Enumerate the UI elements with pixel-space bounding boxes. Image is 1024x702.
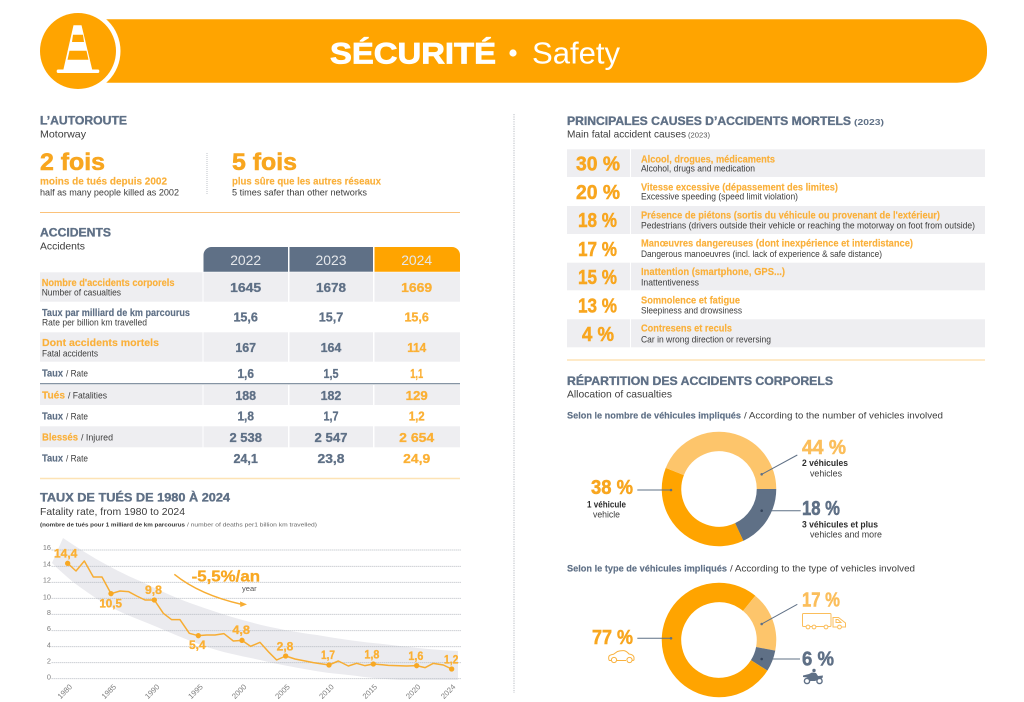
row: injured rate: 24,9: [403, 451, 430, 466]
heading: motorway: [40, 116, 127, 141]
data labels: 14,4: [54, 547, 77, 561]
cause: wrong direction: 4 %: [582, 324, 614, 346]
cause: manoeuvres: [578, 239, 913, 261]
row: rate per billion km: 15,6: [233, 310, 258, 325]
label: 18 percent: vehicles and more: [810, 529, 882, 539]
y axis labels: 16: [43, 543, 51, 552]
row: casualties: 1678: [316, 280, 346, 295]
x axis labels: 2020: [404, 682, 422, 701]
y axis labels: 14: [43, 560, 51, 569]
cause: sleepiness: Sleepiness and drowsiness: [641, 305, 742, 315]
stat: 5 fois: 5 times safer than other networks: [232, 188, 368, 198]
label: 17 percent trucks: [760, 590, 846, 629]
row: fatal accidents: Fatal accidents: [42, 349, 98, 359]
label: 6 percent motorcycles: 6 %: [802, 648, 834, 670]
cause: inattention: Inattentiveness: [641, 277, 699, 287]
label: 77 percent cars: [592, 627, 672, 663]
row: rate per billion km: 15,6: [404, 310, 429, 325]
panel: motorway: [40, 116, 460, 212]
label: 18 percent: 3 véhicules et plus: [802, 519, 878, 529]
cause: speeding: [576, 182, 838, 204]
label: 17 percent trucks: 17 %: [802, 590, 840, 612]
data labels: 1,2: [444, 652, 458, 666]
row: fatalities rate: Taux: [42, 411, 63, 422]
row: injured: 2 547: [314, 430, 348, 445]
row: injured rate: 24,1: [233, 451, 258, 466]
heading: accidents: ACCIDENTS: [40, 228, 111, 240]
y axis labels: 10: [43, 592, 51, 601]
icon: motorcycle: [803, 669, 823, 684]
trend band: [52, 538, 458, 680]
donut chart: type of vehicles: [652, 573, 786, 702]
row: injured: 2 538: [229, 430, 262, 445]
heading: accidents: [40, 228, 111, 253]
cause: wrong direction: Contresens et reculs: [641, 324, 732, 335]
row: casualties: 1669: [401, 280, 432, 295]
title: Safety: [532, 36, 620, 70]
y axis labels: 6: [47, 624, 51, 633]
x axis labels: 2010: [317, 682, 336, 701]
cause row backgrounds: [567, 149, 985, 347]
cause: speeding: Vitesse excessive (dépassement des limites): [641, 182, 838, 193]
label: 6 percent motorcycles: [760, 648, 834, 684]
row: fatal accidents rate: Taux: [42, 368, 63, 379]
row: casualties: 1645: [230, 280, 261, 295]
heading: motorway: L’AUTOROUTE: [40, 116, 127, 128]
x axis labels: [56, 682, 458, 701]
panel: fatal accident causes: [567, 116, 985, 360]
row: fatalities rate: 1,8: [237, 408, 254, 423]
data points: [65, 561, 454, 672]
row: fatalities: [42, 388, 428, 403]
trend arrow and label: -5,5%/an: [192, 569, 260, 586]
data labels: 1,7: [321, 648, 335, 662]
heading: motorway: Motorway: [40, 129, 87, 141]
row: casualties: Number of casualties: [42, 288, 121, 298]
cause: pedestrians: 18 %: [578, 210, 617, 232]
header banner: [20, 8, 987, 94]
heading: accidents: Accidents: [40, 241, 85, 253]
heading: fatality rate: Fatality rate, from 1980 to 2024: [40, 506, 185, 518]
row: injured rate: Taux: [42, 454, 63, 465]
row: fatal accidents: 164: [321, 340, 342, 355]
subheading: type of vehicles: / According to the type of vehicles involved: [730, 564, 915, 575]
panel: allocation of casualties: [567, 375, 943, 702]
row: fatalities: / Fatalities: [68, 391, 107, 401]
cause: pedestrians: Pedestrians (drivers outside their vehicle or reaching the motorway on foot from outside): [641, 221, 975, 231]
heading: fatality rate: TAUX DE TUÉS DE 1980 À 2024: [40, 492, 231, 505]
y axis labels: 4: [47, 640, 51, 649]
line chart: [43, 543, 462, 701]
cause: wrong direction: [582, 324, 771, 346]
label: 38 percent: 38 %: [591, 477, 633, 499]
y axis labels: [43, 543, 51, 682]
data labels: 1,8: [364, 647, 379, 661]
row: rate per billion km: Rate per billion km travelled: [42, 318, 147, 328]
row: rate per billion km: Taux par milliard de km parcourus: [42, 308, 190, 319]
row: injured: Blessés: [42, 432, 78, 444]
data labels: 2,8: [277, 640, 293, 654]
table header years: 2023: [316, 252, 347, 268]
label: 44 percent: 2 véhicules: [802, 458, 848, 468]
subheading: number of vehicles: Selon le nombre de véhicules impliqués: [567, 410, 741, 421]
title: [330, 36, 620, 70]
row: fatal accidents rate: 1,1: [410, 366, 423, 381]
row: injured rate: 23,8: [318, 451, 344, 466]
cause: inattention: 15 %: [578, 267, 617, 289]
label: 44 percent: [760, 437, 848, 479]
row: fatalities: Tués: [42, 390, 65, 402]
y axis labels: 12: [43, 576, 51, 585]
label: 38 percent: [587, 477, 672, 520]
data labels: 1,6: [408, 649, 423, 663]
stat: 2 fois: 2 fois: [40, 149, 105, 176]
label: 38 percent: 1 véhicule: [587, 500, 626, 510]
row: fatal accidents rate: 1,6: [237, 366, 254, 381]
cause: alcohol: Alcool, drogues, médicaments: [641, 154, 775, 165]
row: injured: / Injured: [81, 433, 113, 443]
x axis labels: 2015: [361, 682, 379, 701]
y axis labels: 0: [47, 673, 51, 682]
row: fatalities rate: 1,7: [324, 408, 338, 423]
row: fatalities rate: 1,2: [409, 408, 425, 423]
heading: allocation: Allocation of casualties: [567, 389, 672, 401]
row: injured: 2 654: [399, 430, 435, 445]
label: 44 percent: vehicles: [810, 469, 842, 479]
y axis labels: 2: [47, 656, 51, 665]
heading: fatality rate: / number of deaths per1 billion km travelled): [187, 523, 317, 529]
row: fatalities rate: [42, 408, 425, 423]
label: 38 percent: vehicle: [593, 510, 620, 520]
x axis labels: 2005: [273, 682, 292, 701]
row: casualties: [42, 278, 432, 298]
data labels: 4,8: [232, 623, 250, 637]
cause: manoeuvres: Manœuvres dangereuses (dont inexpérience et interdistance): [641, 239, 913, 250]
subheading: number of vehicles: [567, 410, 943, 421]
cause: alcohol: [576, 154, 775, 176]
label: 18 percent: [760, 498, 882, 539]
trend arrow and label: year: [242, 586, 257, 593]
heading: fatality rate: [40, 492, 317, 529]
x axis labels: 2000: [230, 682, 248, 701]
subheading: number of vehicles: / According to the number of vehicles involved: [744, 410, 943, 421]
data labels: [54, 547, 458, 666]
x axis labels: 1980: [56, 682, 74, 701]
icon: truck: [802, 614, 846, 629]
cause: speeding: 20 %: [576, 182, 620, 204]
label: 44 percent: 44 %: [802, 437, 846, 459]
heading: allocation: RÉPARTITION DES ACCIDENTS CORPORELS: [567, 375, 833, 388]
data labels: 10,5: [99, 596, 122, 610]
cause: sleepiness: 13 %: [578, 296, 617, 318]
row: injured: [42, 430, 435, 445]
cause: inattention: [578, 267, 785, 289]
row: fatal accidents: 167: [235, 340, 256, 355]
row: fatal accidents rate: 1,5: [324, 366, 338, 381]
title: SÉCURITÉ: [330, 36, 496, 70]
trend arrow and label: [174, 569, 260, 607]
stat: 2 fois: moins de tués depuis 2002: [40, 176, 167, 188]
table row backgrounds: [40, 272, 460, 447]
cause: pedestrians: Présence de piétons (sortis du véhicule ou provenant de l'extérieur): [641, 210, 940, 221]
stat: 5 fois: plus sûre que les autres réseaux: [232, 176, 381, 188]
icon: car: [609, 651, 634, 663]
y axis labels: 8: [47, 608, 51, 617]
cause: alcohol: 30 %: [576, 154, 620, 176]
subheading: type of vehicles: Selon le type de véhicules impliqués: [567, 564, 727, 575]
heading: causes: (2023): [854, 117, 884, 127]
table header years: 2022: [230, 252, 261, 268]
data labels: 9,8: [145, 583, 162, 597]
x axis labels: 1985: [100, 682, 118, 701]
row: fatalities: 129: [406, 388, 428, 403]
heading: causes: (2023): [688, 133, 710, 140]
cause: alcohol: Alcohol, drugs and medication: [641, 164, 755, 174]
cause: sleepiness: Somnolence et fatigue: [641, 296, 740, 307]
cause: manoeuvres: 17 %: [578, 239, 617, 261]
row: injured rate: [42, 451, 430, 466]
heading: causes: [567, 116, 884, 141]
subheading: type of vehicles: [567, 564, 915, 575]
stat: 5 fois: [232, 149, 381, 198]
row: fatal accidents: [42, 337, 427, 359]
x axis labels: 2024: [439, 682, 458, 701]
cause: sleepiness: [578, 296, 742, 318]
cause: inattention: Inattention (smartphone, GPS...): [641, 267, 785, 278]
table header years: [204, 247, 460, 272]
cause: wrong direction: Car in wrong direction or reversing: [641, 334, 771, 344]
row: rate per billion km: 15,7: [319, 310, 343, 325]
x axis labels: 1995: [186, 682, 205, 701]
data line: [68, 561, 452, 669]
label: 77 percent cars: 77 %: [592, 627, 633, 649]
heading: causes: Main fatal accident causes: [567, 129, 686, 141]
row: fatal accidents: Dont accidents mortels: [42, 337, 159, 349]
data labels: 5,4: [189, 638, 206, 652]
row: fatal accidents: 114: [407, 340, 427, 355]
row: fatalities rate: / Rate: [66, 411, 88, 421]
row: fatalities: 188: [235, 388, 256, 403]
donut chart: number of vehicles: [656, 426, 782, 552]
panel: accidents table: [40, 228, 460, 478]
x axis labels: 1990: [143, 682, 161, 701]
row: injured rate: / Rate: [66, 454, 88, 464]
row: casualties: Nombre d'accidents corporels: [42, 278, 175, 289]
heading: fatality rate: (nombre de tués pour 1 milliard de km parcourus: [40, 523, 185, 529]
stat: 2 fois: [40, 149, 179, 198]
cause: speeding: Excessive speeding (speed limit violation): [641, 192, 798, 202]
row: rate per billion km: [42, 308, 429, 328]
stat: 5 fois: 5 fois: [232, 149, 297, 176]
heading: allocation: [567, 375, 833, 401]
table header years: 2024: [401, 252, 432, 268]
stat: 2 fois: half as many people killed as 2002: [40, 188, 179, 198]
row: fatal accidents rate: / Rate: [66, 368, 88, 378]
cause: pedestrians: [578, 210, 975, 232]
row: fatalities: 182: [321, 388, 341, 403]
heading: causes: PRINCIPALES CAUSES D’ACCIDENTS MORTELS: [567, 116, 851, 128]
cause: manoeuvres: Dangerous manoeuvres (incl. lack of experience & safe distance): [641, 249, 882, 259]
icon: traffic cone: [40, 13, 116, 89]
label: 18 percent: 18 %: [802, 498, 840, 520]
panel: fatality rate chart: [40, 492, 462, 701]
row: fatal accidents rate: [42, 366, 423, 381]
